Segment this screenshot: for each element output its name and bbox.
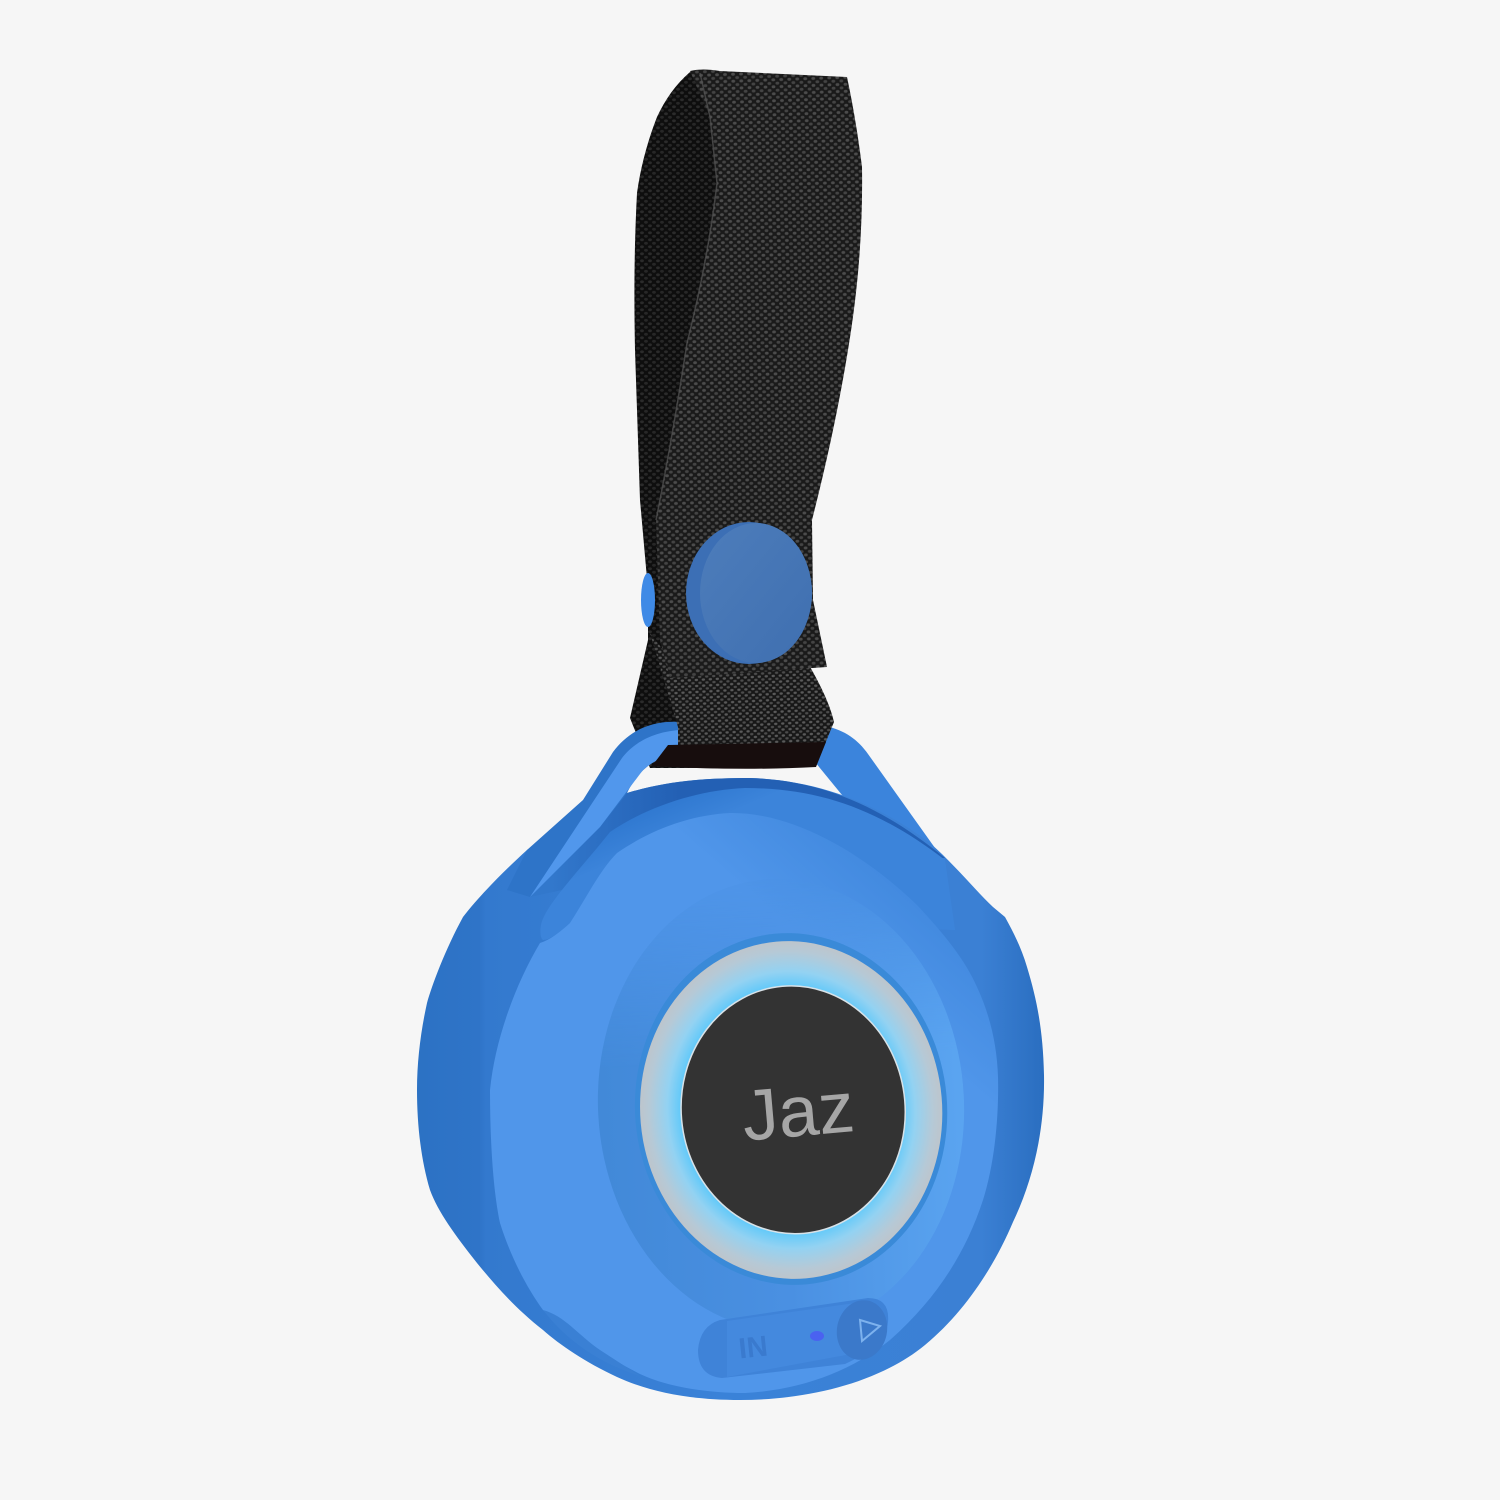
ridge band [540,788,955,940]
left handle highlight strip [530,730,680,897]
strap: back layer [630,72,725,768]
speaker body [417,778,1044,1400]
speaker grille [671,977,916,1243]
fold highlight [656,73,717,520]
left handle [507,722,680,897]
IN port label: IN [737,1331,769,1365]
body rim [417,778,1044,1400]
light ring assembly [620,920,962,1298]
strap: front layer [656,70,862,678]
right handle [815,726,935,848]
snap button [686,522,812,664]
product illustration: blue speaker with strap [417,70,1044,1400]
inner disc [598,946,964,1319]
logo text: Jaz [739,1067,857,1157]
play button [831,1295,893,1365]
speaker face [490,813,998,1393]
bottom rim tab [543,1310,640,1376]
band shadow foot [652,742,826,769]
strap: rear snap peg [641,573,655,627]
strap: lower band [650,633,834,769]
left handle outer [507,722,680,897]
status LED [810,1331,824,1341]
dark lip behind ridge [530,778,945,897]
control panel [698,1295,893,1378]
